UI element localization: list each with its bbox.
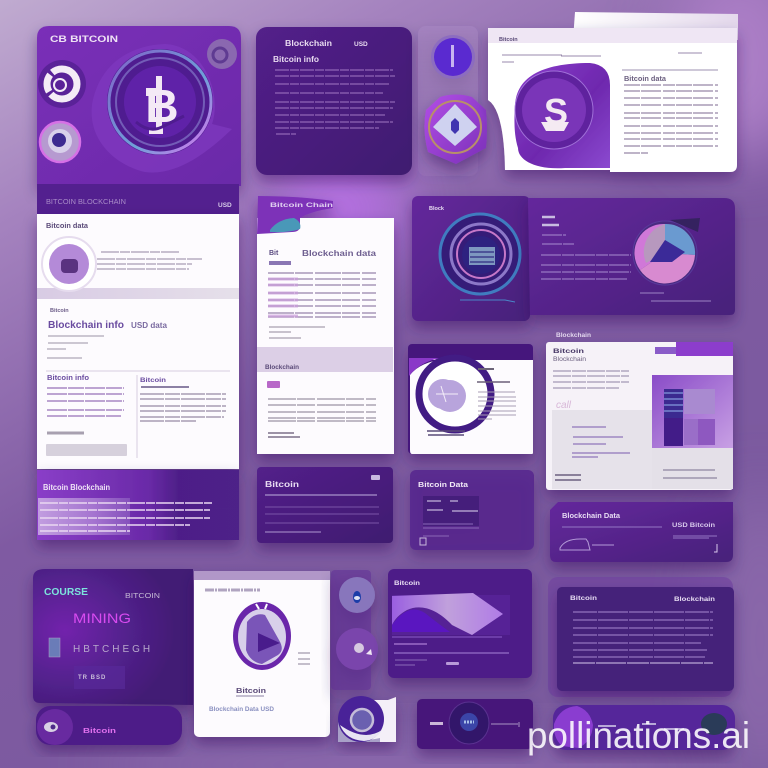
panel: bitcoin hero [37,26,241,186]
footer lines [640,293,711,301]
card title: Bitcoin Data [418,480,469,489]
rule lines [502,53,702,62]
data strip: HBTCHEGH [73,644,153,655]
left tag: Bitcoin [570,595,597,602]
small chart [560,539,614,550]
small label: Bitcoin [499,37,518,43]
body text [268,273,376,317]
watermark: pollinations.ai [527,715,750,756]
card tag: Block [429,206,445,212]
band label: Blockchain [265,364,299,371]
teal heading: COURSE [44,587,88,598]
panel: blue ring card [412,196,530,321]
image chart [652,375,733,448]
panel: dark text card [256,27,412,175]
caption text: Bitcoin [236,688,266,695]
panel: large dark text card [548,577,734,697]
right column [137,375,226,458]
lines [392,636,502,638]
caption rule [236,695,264,697]
section titles: Blockchain info [48,320,124,331]
panel: dark note card [257,467,393,543]
heading: CB BITCOIN [50,34,118,45]
doc heading [269,249,377,265]
wave chart [392,593,510,635]
doc heading: Bitcoin data [46,223,88,230]
tag: USD Bitcoin [672,523,715,529]
intro text [97,252,202,269]
panel: document three [408,344,533,454]
icon: bitcoin coin: B [145,80,179,132]
pink label: Bitcoin [83,726,117,735]
panel: wave card [388,569,532,678]
card title: Bitcoin [394,580,420,587]
pie chart [633,218,700,285]
icon: play circle [233,602,291,670]
text column [622,70,718,153]
panel: white video document [194,571,330,737]
inner table [423,496,479,526]
soft swoosh behind coin [92,44,232,172]
doc caption [205,588,260,592]
doc subheading: Blockchain [553,357,586,363]
icon: white swirl badge [38,60,86,108]
section titles: Bitcoin [50,308,69,314]
panel: document two [257,196,394,454]
left column [46,375,127,456]
right bar [491,722,519,727]
subheading: Bitcoin info [273,54,319,64]
panel: dark footer note [550,502,733,562]
right tag: Blockchain [674,596,715,603]
bar text [40,503,212,531]
icon: violet ring [419,358,491,430]
panel: coin pill [417,699,533,749]
card tag: USD [354,41,368,48]
data box [74,666,125,689]
panel: neon title card [33,569,193,705]
pink tag [267,381,280,388]
icon: violet blob [554,706,593,748]
lower text [268,399,376,421]
panel: white coin document [488,28,737,172]
blue caption: Blockchain Data USD [209,707,275,713]
doc heading: Bitcoin [553,348,584,355]
neon heading: MINING [73,610,131,626]
panel: bottom right pill [553,705,735,750]
left bar [430,722,443,725]
icon column: badges [331,570,378,690]
card title: Bitcoin [265,480,299,489]
small button [446,662,459,665]
strip icon [49,638,60,657]
back sheet [573,12,738,40]
grey text block [555,427,717,480]
panel: translucent note card [410,470,534,550]
panel: purple text band [37,470,239,540]
rows [562,527,717,538]
body text [275,70,395,134]
panel: pie chart card [528,198,735,315]
panel: pill row left [36,706,182,745]
footer band [37,184,239,215]
icon: wrapped coin [338,696,396,742]
box text: TR BSD [78,675,106,681]
icon: lilac circle [42,237,96,291]
doc heading: Bit [269,250,279,257]
caption lines [541,217,631,279]
pink highlights [268,279,298,316]
section titles [48,308,168,331]
icon: hand badge [336,628,378,670]
band tag: USD [218,202,232,209]
short lines [47,336,104,358]
table text [427,501,478,511]
body text [553,371,629,388]
icon: fuchsia hex badge [424,94,487,164]
section titles: USD data [131,321,168,330]
pill text [598,724,684,729]
card lines [265,494,377,496]
icon: blue lens badge [339,577,375,613]
purple tab [257,196,333,234]
band title: Bitcoin Blockchain [43,483,110,492]
floating label: Blockchain [556,332,591,339]
column heading: Bitcoin data [624,76,666,83]
icon: concentric rings [440,214,520,294]
right column: Bitcoin [140,377,166,384]
tab label: Bitcoin Chain [270,202,333,209]
body text [573,612,713,657]
icon: teal gem [701,713,727,735]
icon: bitcoin coin [107,49,213,155]
left column: Bitcoin info [47,375,89,382]
highlighted bars [38,498,130,535]
card title: Blockchain [285,39,332,48]
title: Blockchain Data [562,513,620,520]
icon: dark orb [449,702,489,744]
panel: document four [546,342,733,490]
text lines [478,368,494,370]
band caption: BITCOIN BLOCKCHAIN [46,199,126,206]
grey tag: BITCOIN [125,591,160,600]
tag [371,475,380,480]
side lines [298,653,310,664]
pale script: call [556,400,572,411]
grey band [37,288,239,299]
icon: purple coin blob: S [544,91,568,132]
short text [269,327,325,338]
grey region [552,410,652,489]
doc heading: Blockchain data [302,249,377,258]
panel: big white document [37,214,239,469]
grey button [46,444,127,456]
lilac band [257,347,393,372]
icon: lilac lens badge [40,122,80,162]
icon: blue orb column [418,26,478,176]
icon: eye badge [37,709,73,745]
icon: grey ring badge [207,39,237,69]
icon: purple coin blob [514,63,610,168]
inner card [557,587,734,691]
